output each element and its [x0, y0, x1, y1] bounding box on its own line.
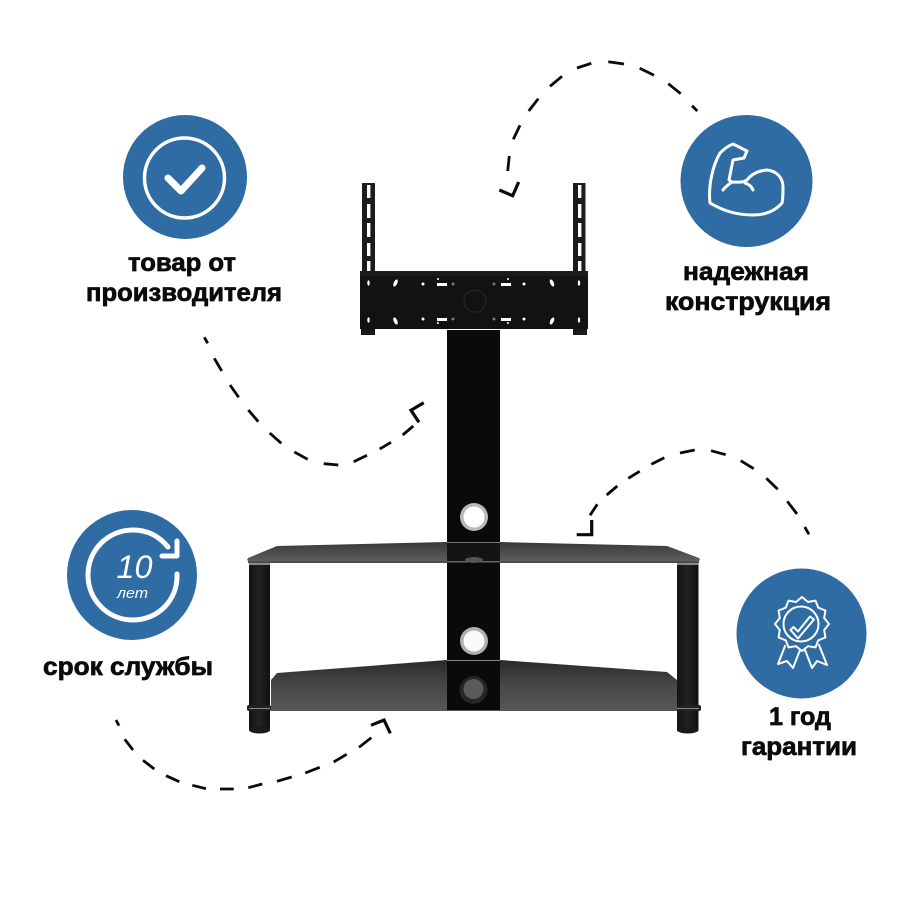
left leg — [247, 563, 271, 734]
upper glass shelf — [247, 542, 700, 563]
label line 2: производителя — [86, 279, 282, 307]
arrow: bottom left to lower shelf — [116, 720, 390, 789]
wall mount bracket — [360, 183, 588, 335]
icon: circular arrow — [88, 530, 177, 620]
icon: flexed arm — [710, 144, 783, 215]
label line 2: гарантии — [741, 733, 857, 761]
lower shelf reflection — [447, 660, 500, 704]
badge: construction — [680, 115, 812, 286]
cable hole upper — [460, 503, 488, 531]
cable hole lower — [460, 627, 488, 655]
icon: ribbon medal — [775, 597, 829, 668]
text: 10: 10 — [116, 549, 153, 585]
badge: service life — [43, 510, 213, 681]
lower glass shelf — [271, 660, 677, 711]
label: надежная — [683, 258, 809, 286]
arrow: top right to mount — [499, 62, 697, 196]
arrow: right to shelf — [577, 450, 809, 535]
product: TV stand — [247, 183, 701, 734]
label line 2: конструкция — [665, 288, 831, 316]
right leg — [677, 563, 701, 734]
arrow: left to column — [204, 337, 424, 465]
central column — [447, 330, 500, 710]
badge: manufacturer — [123, 115, 247, 277]
icon: check in ring — [144, 138, 224, 218]
circle — [736, 568, 866, 698]
label: товар от — [128, 249, 236, 277]
circle — [67, 510, 197, 640]
label: 1 год — [769, 703, 831, 731]
text: years: лет — [116, 585, 148, 602]
label: срок службы — [43, 653, 213, 681]
circle — [680, 115, 812, 247]
circle — [123, 115, 247, 239]
badge: warranty — [736, 568, 866, 731]
